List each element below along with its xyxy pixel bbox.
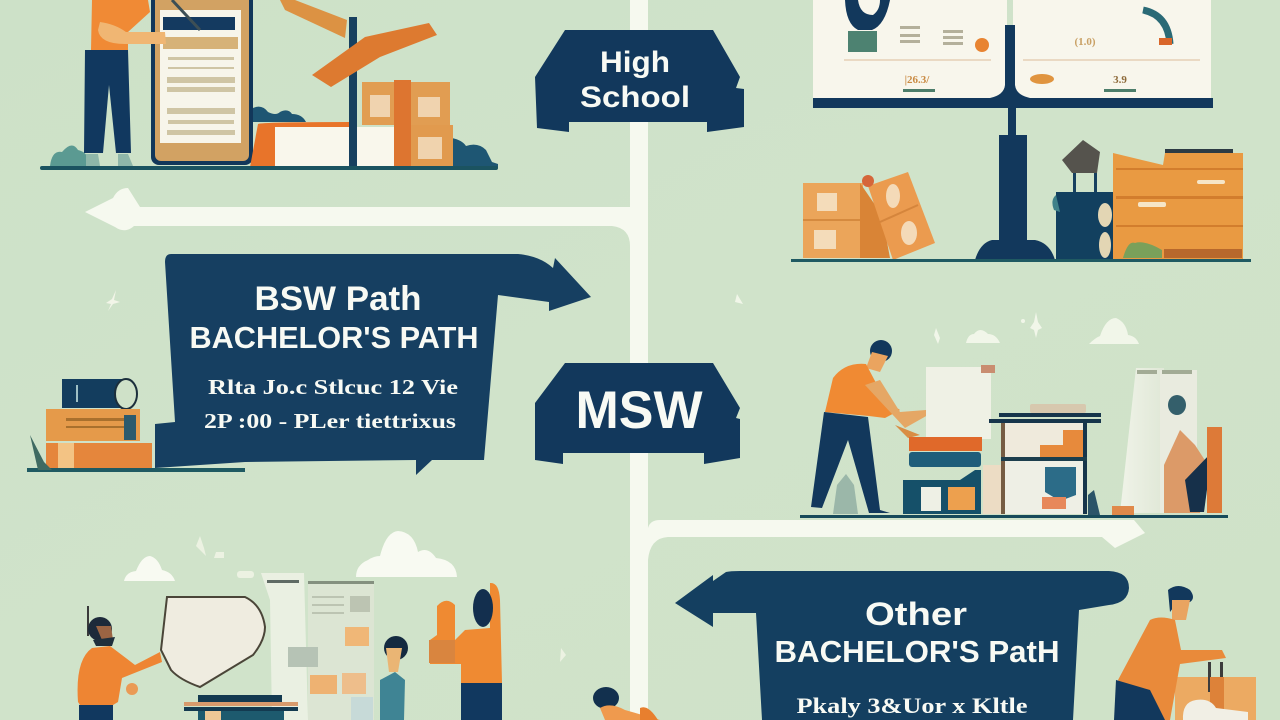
signpost bbox=[280, 0, 437, 168]
panel: other bachelor's path: BACHELOR'S PatH bbox=[774, 634, 1060, 669]
board panels: 3.9 bbox=[1113, 74, 1127, 86]
badge: High School: High bbox=[600, 46, 670, 79]
lantern bbox=[833, 474, 858, 514]
panel: BSW path: Rlta Jo.c Stlcuc 12 Vie bbox=[208, 375, 458, 399]
scene: mug and books bbox=[27, 379, 245, 472]
badge: High School bbox=[535, 30, 744, 132]
clouds bbox=[124, 531, 457, 581]
orange person reaching up bbox=[429, 583, 502, 720]
stand bbox=[813, 25, 1213, 260]
badge: MSW: MSW bbox=[576, 381, 702, 440]
navy canister with diamond top bbox=[1052, 140, 1122, 260]
vertical trunk line bbox=[630, 0, 648, 720]
badge: MSW bbox=[535, 363, 740, 464]
board panels bbox=[813, 0, 1211, 98]
orange cabinet bbox=[1113, 149, 1243, 260]
suitcase bbox=[1175, 662, 1256, 720]
person with pointer bbox=[84, 0, 200, 166]
scene: person with suitcase, lower right bbox=[1114, 586, 1256, 720]
panel: other bachelor's path: Pkaly 3&Uor x Kltle bbox=[796, 693, 1028, 718]
panel: BSW path bbox=[155, 254, 591, 475]
mug bbox=[62, 379, 137, 409]
panel: BSW path: 2P :00 - PLer tiettrixus bbox=[204, 409, 456, 433]
person bbox=[811, 340, 928, 513]
books bbox=[46, 409, 152, 470]
panel: BSW path: BACHELOR'S PATH bbox=[190, 320, 478, 355]
arrow: left branch toward top-left scene bbox=[85, 188, 630, 246]
small teal person bbox=[380, 636, 408, 720]
shelving unit bbox=[989, 404, 1101, 514]
scene: person working at press with shelves bbox=[800, 340, 1228, 518]
scene: information board on stand with boxes bbox=[791, 0, 1251, 262]
stacked boxes bbox=[362, 80, 453, 167]
ground line bbox=[800, 515, 1228, 518]
book bbox=[250, 122, 400, 167]
panel: BSW path: BSW Path bbox=[254, 280, 422, 318]
ground line bbox=[27, 468, 245, 472]
icon: partial orange shape at bottom edge bbox=[640, 707, 658, 720]
person bbox=[1114, 586, 1226, 720]
icons: clouds and sparkles, mid right bbox=[735, 294, 1139, 344]
icon: sparkle, left bbox=[106, 290, 120, 311]
shield bbox=[161, 597, 265, 687]
ground line bbox=[791, 259, 1251, 262]
left cardboard boxes bbox=[803, 172, 935, 260]
shield person bbox=[78, 606, 162, 720]
board panels: (1.0) bbox=[1074, 36, 1096, 48]
bending person at bottom bbox=[593, 687, 660, 720]
tall sheets and figure bbox=[1120, 368, 1222, 513]
scene: team with shield and notice board bbox=[78, 531, 660, 720]
badge: High School: School bbox=[580, 81, 690, 114]
panel: other bachelor's path bbox=[675, 571, 1129, 720]
press with paper and books bbox=[903, 365, 1013, 514]
printing machine bbox=[184, 695, 298, 720]
board panels: |26.3/ bbox=[905, 74, 930, 86]
scene: person at phone with signpost and boxes bbox=[40, 0, 498, 170]
arrow: right branch toward lower-right scene bbox=[648, 520, 1145, 560]
phone bbox=[151, 0, 253, 165]
sparkles bbox=[196, 536, 566, 662]
bushes bbox=[50, 107, 498, 168]
notice board bbox=[261, 573, 374, 720]
ground line bbox=[40, 166, 498, 170]
panel: other bachelor's path: Other bbox=[865, 596, 967, 632]
